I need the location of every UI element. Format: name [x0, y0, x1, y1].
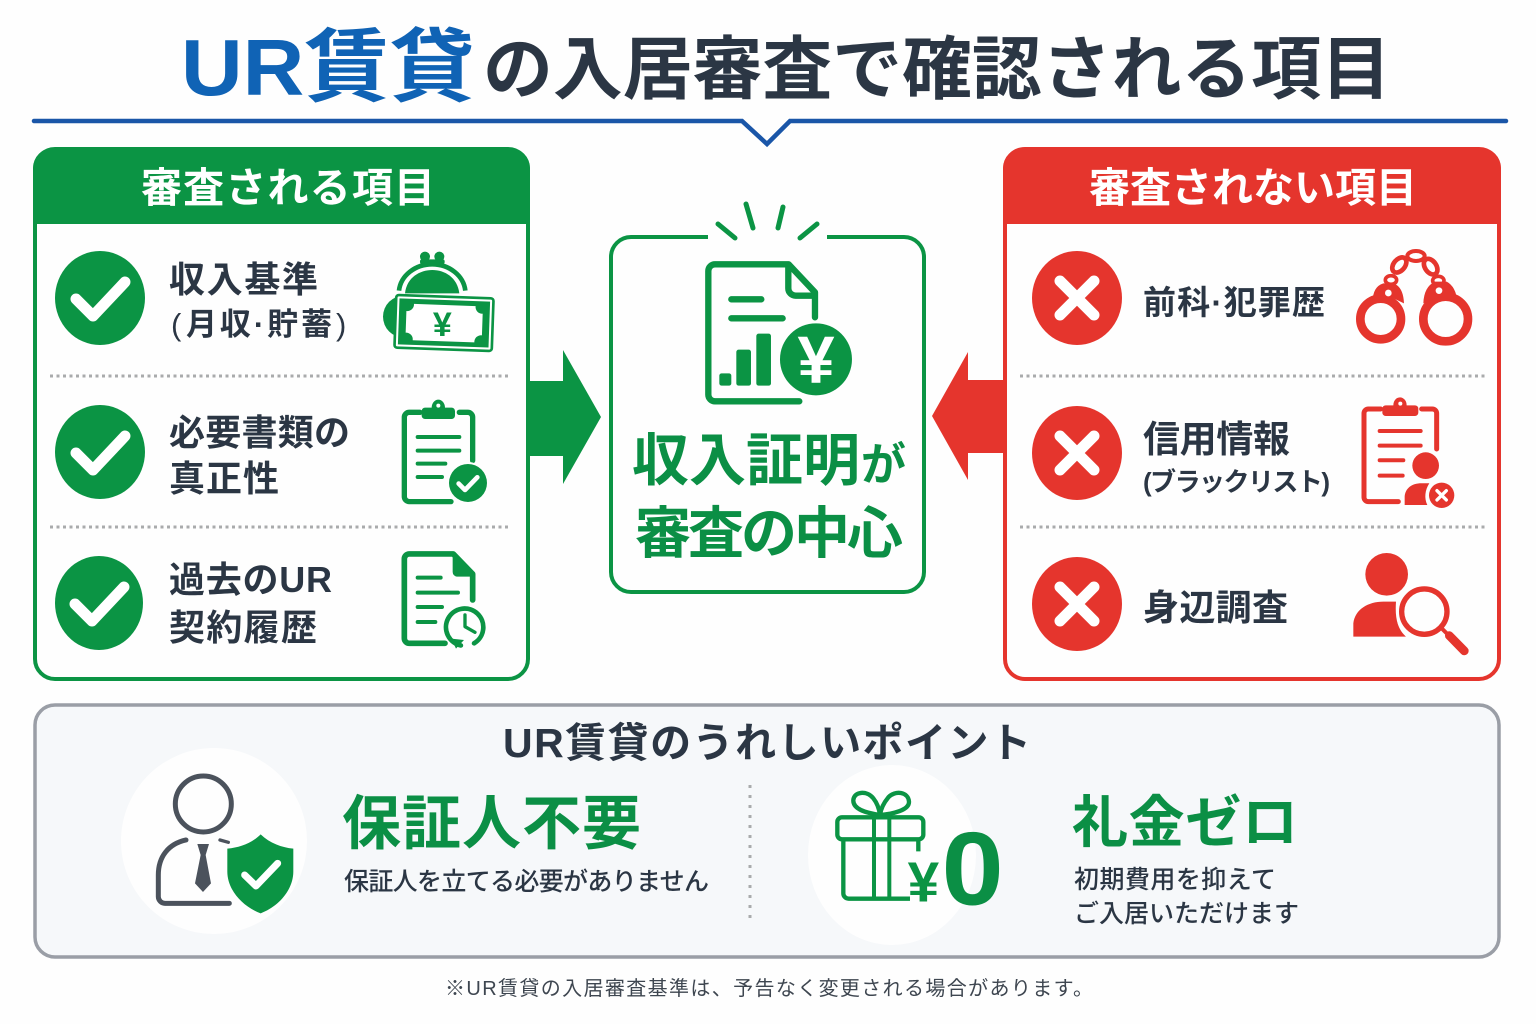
icon: person with shield — [158, 776, 293, 913]
row: document authenticity — [55, 400, 489, 504]
row: background investigation — [1032, 553, 1464, 651]
icon: check — [55, 405, 145, 499]
text: document authenticity: 真正性 — [169, 458, 279, 499]
icon: gift with yen zero: 0 — [942, 811, 1004, 927]
text: income proof is central: 収入証明 — [632, 429, 860, 493]
rays — [718, 204, 817, 238]
title rule with notch — [34, 121, 1506, 144]
icon: document with chart and yen — [708, 264, 852, 401]
icon: clipboard with check — [404, 400, 489, 504]
text: income proof is central: 審査の中心 — [635, 502, 903, 565]
text: document authenticity: 必要書類の — [169, 412, 350, 453]
footnote: ※UR賃貸の入居審査基準は、予告なく変更される場合があります。 — [445, 977, 1093, 1000]
icon: handcuffs — [1360, 251, 1468, 341]
icon: check — [55, 556, 143, 650]
title: UR賃貸 — [181, 23, 475, 112]
row: past UR contract history — [55, 554, 489, 650]
text: past UR contract history: 契約履歴 — [169, 607, 317, 648]
text: credit information: (ブラックリスト) — [1143, 467, 1330, 497]
text: criminal record: 前科·犯罪歴 — [1143, 284, 1325, 321]
panel: items reviewed — [33, 148, 530, 679]
text: past UR contract history — [169, 559, 332, 648]
text: income criteria: ) — [336, 307, 346, 342]
row: credit information — [1032, 397, 1454, 508]
text: credit information: 信用情報 — [1143, 419, 1290, 460]
panel: center income proof — [611, 204, 924, 592]
panel header: items reviewed — [33, 148, 530, 224]
icon: gift with yen zero: ¥ — [908, 852, 940, 915]
text: no key money: ご入居いただけます — [1074, 900, 1299, 928]
icon: check — [55, 251, 145, 345]
row: income criteria — [55, 251, 494, 351]
text: no key money — [1072, 791, 1299, 928]
panel header: items not reviewed — [1003, 148, 1501, 224]
text: no key money: 初期費用を抑えて — [1074, 866, 1276, 894]
text: income criteria: 月収·貯蓄 — [186, 307, 332, 342]
panel header: items reviewed: 審査される項目 — [141, 165, 435, 211]
text: credit information — [1143, 419, 1330, 497]
arrow: green pointing right — [529, 350, 601, 484]
text: no guarantor: 保証人不要 — [342, 791, 641, 857]
arrow: red pointing left — [932, 352, 1004, 480]
benefit: no guarantor — [121, 748, 709, 934]
text: income criteria — [169, 259, 346, 342]
panel header: items not reviewed: 審査されない項目 — [1089, 165, 1417, 211]
row: criminal record — [1032, 251, 1468, 345]
icon: gift with yen zero — [837, 793, 1004, 927]
text: document authenticity — [169, 412, 350, 499]
icon: cross — [1032, 251, 1122, 345]
icon: clipboard with person and cross — [1364, 397, 1454, 508]
text: no guarantor: 保証人を立てる必要がありません — [344, 868, 709, 896]
benefit: no key money — [808, 765, 1299, 945]
panel: UR benefits — [35, 705, 1499, 957]
icon: document with clock — [404, 554, 489, 649]
text: past UR contract history: 過去のUR — [169, 559, 332, 600]
icon: wallet and banknote — [383, 252, 494, 351]
text: income criteria: ( — [171, 307, 182, 342]
text: income proof is central: が — [861, 439, 906, 490]
icon: person with magnifier — [1353, 553, 1464, 651]
heading: benefits: UR賃貸のうれしいポイント — [503, 720, 1031, 766]
text: income proof is central — [632, 429, 906, 565]
icon: cross — [1032, 557, 1122, 651]
icon: wallet and banknote: ¥ — [433, 306, 452, 344]
text: no guarantor — [342, 791, 709, 896]
panel: items not reviewed — [1003, 148, 1501, 679]
text: background investigation: 身辺調査 — [1143, 587, 1288, 628]
icon: cross — [1032, 406, 1122, 500]
title: の入居審査で確認される項目 — [483, 31, 1391, 108]
text: income criteria: 収入基準 — [169, 259, 318, 300]
icon: document with chart and yen: ¥ — [797, 324, 835, 398]
text: no key money: 礼金ゼロ — [1072, 791, 1298, 854]
title — [181, 23, 1391, 112]
